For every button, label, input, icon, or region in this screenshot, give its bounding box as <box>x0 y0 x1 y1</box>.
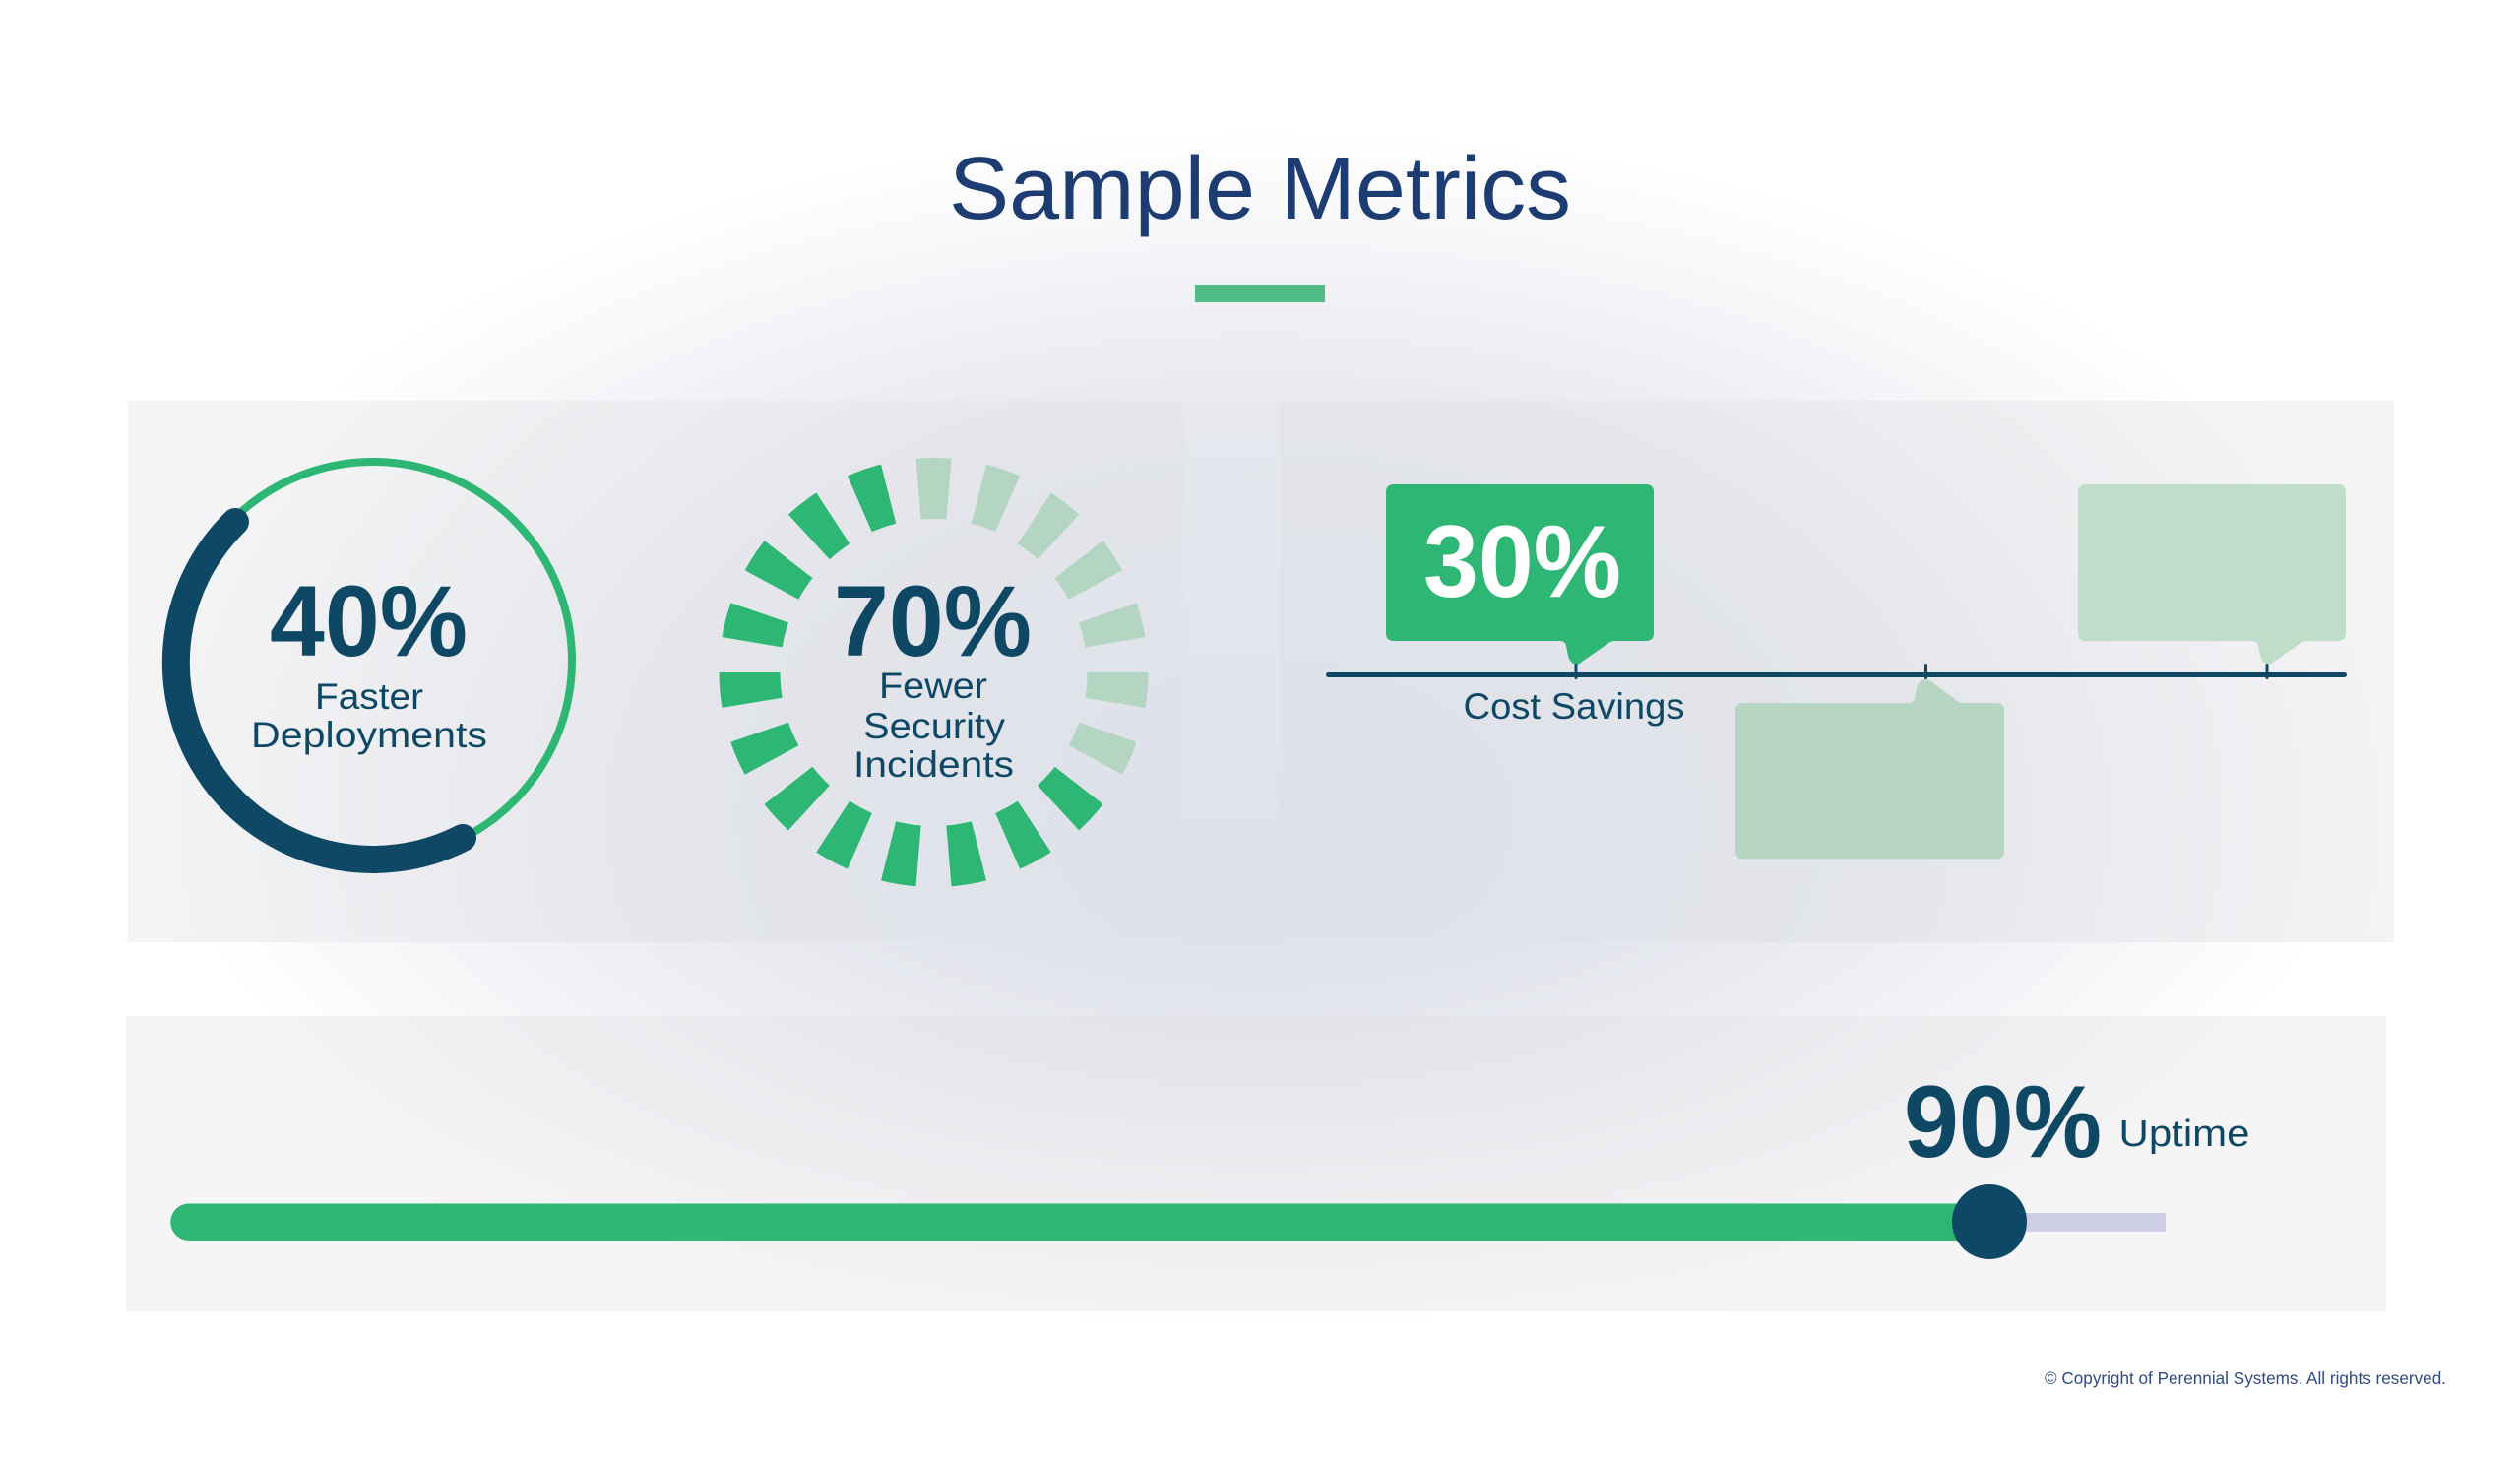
segmented ring <box>719 458 1149 887</box>
value: 90%: 90% <box>1904 1065 2102 1179</box>
panel: uptime background <box>126 1016 2386 1311</box>
timeline axis <box>1326 664 2347 679</box>
label: Fewer Security Incidents: Security <box>863 706 1006 746</box>
label: Cost Savings: Cost Savings <box>1463 686 1685 727</box>
label: Faster Deployments: Faster <box>315 676 423 717</box>
slider remainder track <box>1989 1213 2166 1232</box>
slider progress bar <box>170 1203 1989 1241</box>
ring progress arc <box>176 522 463 860</box>
callout: 30% active <box>1386 484 1654 665</box>
metric: 70% fewer security incidents <box>719 458 1149 887</box>
title accent bar <box>1195 285 1325 302</box>
slider knob <box>1952 1184 2027 1259</box>
label: Faster Deployments <box>251 676 487 755</box>
callout: empty lower <box>1735 679 2004 859</box>
callout: empty upper <box>2078 484 2346 665</box>
value: 70%: 70% <box>834 565 1032 677</box>
label: Fewer Security Incidents: Fewer <box>879 666 987 706</box>
ring track <box>174 462 572 860</box>
value: 40%: 40% <box>270 565 468 677</box>
title: Sample Metrics <box>949 140 1571 238</box>
label: Uptime: Uptime <box>2118 1114 2250 1155</box>
value: 30%: 30% <box>1423 505 1621 619</box>
label: Fewer Security Incidents <box>853 666 1014 785</box>
metric: 40% faster deployments <box>174 462 572 860</box>
metric: 90% uptime slider <box>170 1065 2250 1259</box>
copyright footer: © Copyright of Perennial Systems. All rights reserved. <box>2045 1369 2446 1388</box>
panel: top metrics <box>128 401 2394 942</box>
label: Faster Deployments: Deployments <box>251 715 487 755</box>
label: Fewer Security Incidents: Incidents <box>853 744 1014 785</box>
metric: 30% cost savings timeline <box>1326 484 2347 859</box>
